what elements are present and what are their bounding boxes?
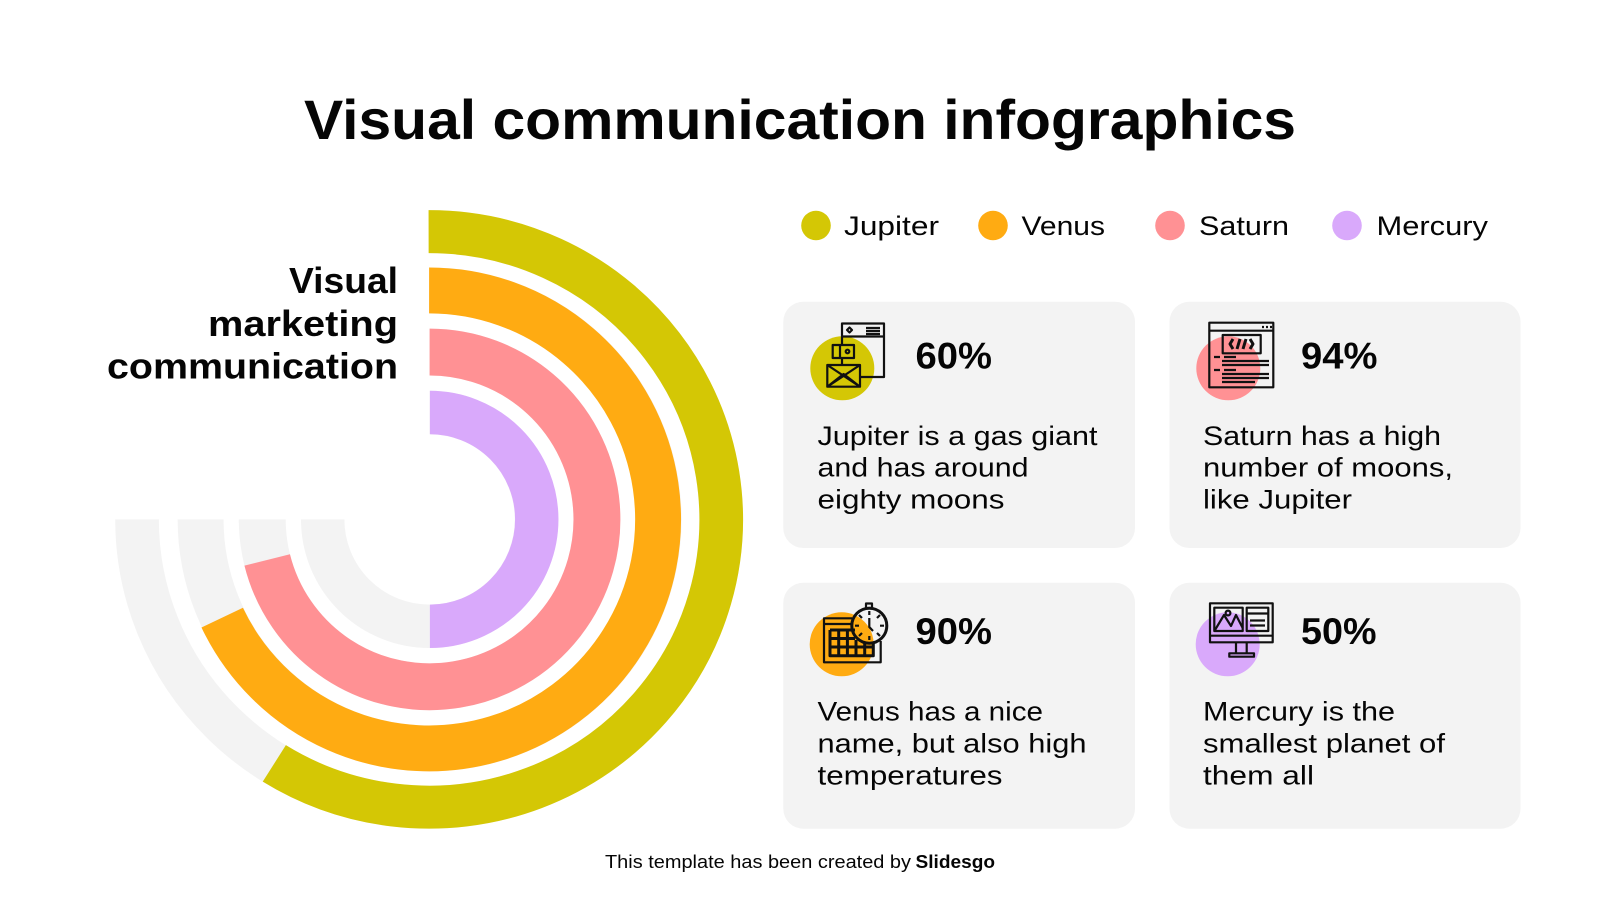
chart heading: Visual bbox=[289, 260, 398, 301]
track: Saturn bbox=[262, 352, 597, 687]
footer credit: This template has been created by bbox=[605, 852, 911, 872]
panel: Jupiter bbox=[783, 302, 1135, 548]
chart heading: marketing bbox=[208, 303, 398, 344]
description: and has around bbox=[818, 452, 1028, 482]
description: Mercury is the bbox=[1203, 696, 1395, 726]
legend item: Jupiter: Jupiter bbox=[844, 211, 939, 241]
panel: Saturn bbox=[1170, 302, 1520, 548]
description: Jupiter is a gas giant bbox=[818, 421, 1098, 451]
legend item: Mercury: Mercury bbox=[1376, 211, 1489, 241]
track: Jupiter bbox=[137, 232, 721, 807]
icon: mail and wallet window bbox=[810, 324, 884, 400]
legend item: Venus: Venus bbox=[1022, 211, 1105, 241]
legend item: Jupiter bbox=[801, 211, 939, 241]
chart heading: communication bbox=[107, 346, 398, 386]
legend bbox=[801, 211, 1489, 241]
chart heading bbox=[107, 260, 398, 386]
description bbox=[818, 696, 1086, 790]
description bbox=[1203, 421, 1453, 515]
description: smallest planet of bbox=[1203, 728, 1446, 758]
arc: Mercury bbox=[430, 413, 537, 626]
legend item: Saturn: Saturn bbox=[1199, 211, 1289, 241]
icon: calendar and stopwatch bbox=[810, 604, 887, 676]
arc: Jupiter bbox=[274, 232, 721, 807]
legend item: Mercury bbox=[1332, 211, 1489, 241]
footer credit: Slidesgo bbox=[916, 852, 995, 872]
description: name, but also high bbox=[818, 728, 1086, 758]
description: Saturn has a high bbox=[1203, 421, 1441, 451]
legend item: Saturn bbox=[1155, 211, 1289, 241]
description bbox=[818, 421, 1098, 515]
description: Venus has a nice bbox=[818, 696, 1043, 726]
description: them all bbox=[1203, 760, 1314, 790]
panel: Mercury bbox=[1170, 583, 1520, 829]
legend item: Venus bbox=[978, 211, 1105, 241]
description: number of moons, bbox=[1203, 452, 1453, 482]
percentage: 60% bbox=[916, 336, 992, 376]
radial bar chart bbox=[137, 232, 721, 807]
title: Visual communication infographics bbox=[304, 88, 1296, 151]
description bbox=[1203, 696, 1446, 790]
track: Venus bbox=[201, 290, 659, 748]
icon: monitor bbox=[1196, 603, 1273, 676]
description: like Jupiter bbox=[1203, 485, 1352, 515]
percentage: 50% bbox=[1301, 611, 1376, 652]
percentage: 90% bbox=[916, 611, 992, 652]
description: temperatures bbox=[818, 760, 1002, 790]
track: Mercury bbox=[323, 413, 536, 626]
arc: Venus bbox=[222, 290, 658, 748]
percentage: 94% bbox=[1301, 336, 1378, 376]
arc: Saturn bbox=[267, 352, 597, 687]
icon: code window bbox=[1196, 323, 1273, 400]
panel: Venus bbox=[783, 583, 1135, 829]
description: eighty moons bbox=[818, 485, 1004, 515]
